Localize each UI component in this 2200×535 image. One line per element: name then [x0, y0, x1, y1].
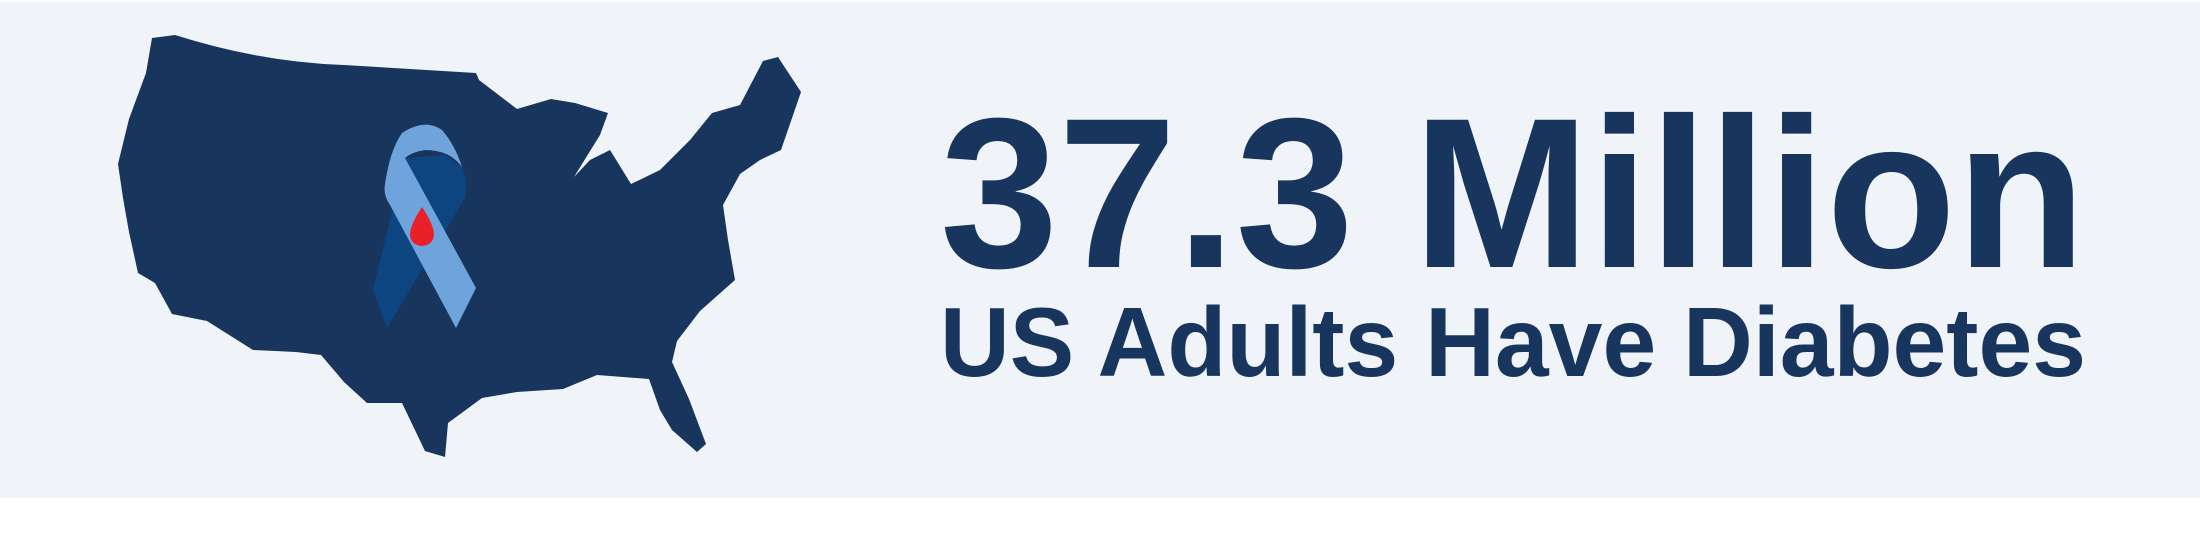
icon: awareness ribbon	[373, 125, 476, 328]
subheading: US Adults Have Diabetes	[940, 287, 2086, 397]
headline number: 37.3 Million	[940, 74, 2086, 313]
icon: blood drop	[410, 207, 434, 246]
icon: US map	[118, 35, 801, 457]
